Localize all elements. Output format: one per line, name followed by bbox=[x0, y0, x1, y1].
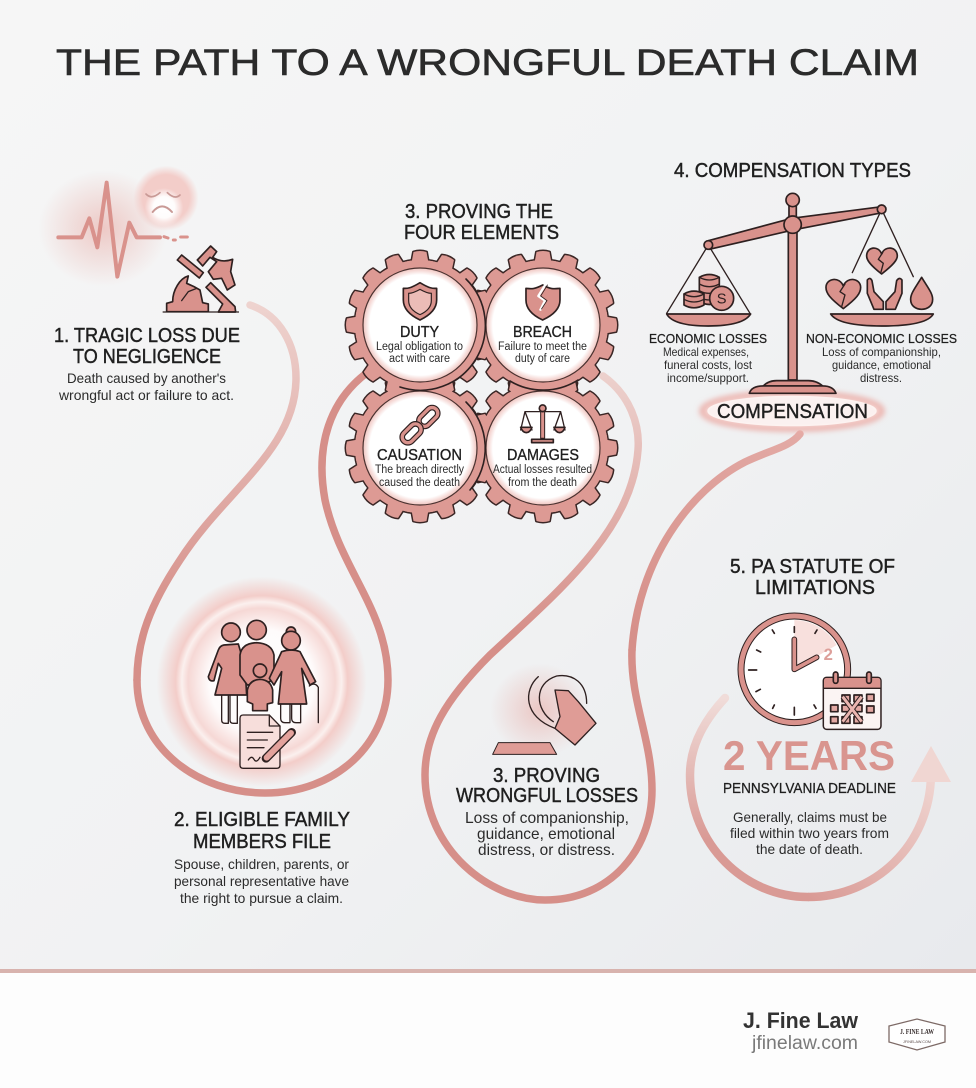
non-economic losses: distress. bbox=[860, 371, 902, 385]
economic losses: funeral costs, lost bbox=[664, 358, 753, 372]
panel: step 1 tragic loss bbox=[38, 166, 240, 403]
logo badge: J. FINE LAW bbox=[900, 1028, 934, 1036]
heading: 1. TRAGIC LOSS DUE bbox=[54, 325, 240, 347]
heading bbox=[174, 809, 350, 853]
panel: step 2 eligible family bbox=[157, 577, 367, 906]
description: Loss of companionship, bbox=[465, 810, 629, 827]
icon: scales of justice small bbox=[521, 405, 565, 443]
panel: step 4 compensation types bbox=[632, 160, 957, 650]
brand name: J. Fine Law bbox=[743, 1008, 859, 1033]
description: wrongful act or failure to act. bbox=[58, 387, 234, 403]
icon: right pan with hearts, hands, drop bbox=[826, 248, 933, 326]
compensation label: COMPENSATION bbox=[717, 401, 868, 423]
heading bbox=[456, 765, 638, 807]
heading bbox=[404, 201, 559, 244]
icon: family with document bbox=[157, 577, 367, 787]
heading: FOUR ELEMENTS bbox=[404, 222, 559, 244]
panel: step 3 four elements bbox=[346, 201, 617, 522]
icon: shield bbox=[403, 283, 437, 320]
description: the date of death. bbox=[756, 841, 863, 857]
icon: left pan with coins bbox=[667, 274, 751, 326]
gear interlock arcs bbox=[400, 279, 578, 490]
title: THE PATH TO A WRONGFUL DEATH CLAIM bbox=[56, 42, 919, 83]
gear: breach bbox=[478, 260, 608, 390]
arrow: circular deadline arrow bbox=[690, 698, 951, 897]
description bbox=[498, 341, 587, 365]
description: Failure to meet the bbox=[498, 341, 587, 353]
description: Actual losses resulted bbox=[493, 464, 592, 476]
heading: MEMBERS FILE bbox=[193, 831, 331, 853]
description bbox=[376, 341, 463, 365]
heading: 5. PA STATUTE OF bbox=[730, 556, 895, 578]
icon: left pan with coins: S bbox=[717, 292, 727, 308]
description: The breach directly bbox=[375, 464, 464, 476]
heading: TO NEGLIGENCE bbox=[73, 346, 221, 368]
compensation oval bbox=[702, 393, 882, 429]
gear: duty bbox=[355, 260, 485, 390]
economic losses: ECONOMIC LOSSES bbox=[649, 331, 767, 346]
description: guidance, emotional bbox=[477, 826, 615, 843]
non-economic losses: Loss of companionship, bbox=[822, 345, 941, 359]
non-economic losses: guidance, emotional bbox=[832, 358, 931, 372]
icon: gavel and hand bbox=[490, 663, 596, 757]
logo badge: JFINELAW.COM bbox=[903, 1040, 931, 1044]
icon: clock and calendar bbox=[741, 616, 881, 729]
icon: broken gavel bbox=[163, 246, 239, 312]
label: CAUSATION bbox=[377, 447, 462, 464]
description: personal representative have bbox=[174, 873, 349, 889]
gear: causation bbox=[355, 383, 485, 513]
icon: chain link bbox=[400, 405, 440, 445]
big number: 2 YEARS bbox=[723, 732, 895, 779]
label: BREACH bbox=[513, 324, 572, 341]
description: act with care bbox=[389, 353, 450, 365]
icon: balance scale bbox=[667, 193, 933, 393]
description: from the death bbox=[508, 477, 577, 489]
label: DAMAGES bbox=[507, 447, 579, 464]
description: Death caused by another's bbox=[67, 370, 226, 386]
heading: LIMITATIONS bbox=[755, 577, 875, 599]
website: jfinelaw.com bbox=[751, 1033, 858, 1054]
heading: 3. PROVING THE bbox=[405, 201, 553, 223]
non-economic losses: NON-ECONOMIC LOSSES bbox=[806, 331, 957, 346]
description bbox=[174, 856, 349, 906]
heading: 4. COMPENSATION TYPES bbox=[674, 160, 911, 182]
description bbox=[465, 810, 629, 859]
description: caused the death bbox=[379, 477, 460, 489]
connector path: gears to losses loop bbox=[425, 376, 652, 900]
icon: clock and calendar: 2 bbox=[824, 645, 833, 664]
heading bbox=[730, 556, 895, 599]
heading: WRONGFUL LOSSES bbox=[456, 785, 638, 807]
description: Generally, claims must be bbox=[733, 809, 887, 825]
gear: damages bbox=[478, 383, 608, 513]
description: filed within two years from bbox=[730, 825, 889, 841]
panel: step 5 statute of limitations bbox=[690, 556, 951, 897]
connector path: family loop to gears bbox=[137, 372, 388, 793]
description: distress, or distress. bbox=[478, 842, 615, 859]
heading: 3. PROVING bbox=[493, 765, 600, 787]
non-economic losses bbox=[806, 331, 957, 385]
economic losses: Medical expenses, bbox=[663, 345, 749, 359]
logo badge bbox=[889, 1019, 945, 1050]
icon: heartbeat and sad face bbox=[38, 166, 199, 287]
economic losses bbox=[649, 331, 767, 385]
connector path: step 1 to family loop bbox=[137, 305, 296, 680]
footer bbox=[0, 969, 976, 1088]
heading bbox=[54, 325, 240, 368]
sublabel: PENNSYLVANIA DEADLINE bbox=[723, 780, 896, 797]
description bbox=[730, 809, 889, 857]
label: DUTY bbox=[400, 324, 439, 341]
heading: 2. ELIGIBLE FAMILY bbox=[174, 809, 350, 831]
economic losses: income/support. bbox=[667, 371, 749, 385]
description: duty of care bbox=[515, 353, 570, 365]
gear teeth bbox=[346, 251, 617, 522]
description: Spouse, children, parents, or bbox=[174, 856, 349, 872]
description: Legal obligation to bbox=[376, 341, 463, 353]
description bbox=[58, 370, 234, 403]
icon: cracked shield bbox=[526, 283, 560, 320]
description: the right to pursue a claim. bbox=[180, 890, 343, 906]
description bbox=[375, 464, 464, 489]
description bbox=[493, 464, 592, 489]
panel: step 3 wrongful losses bbox=[456, 663, 638, 859]
connector path: compensation outflow bbox=[632, 434, 800, 650]
